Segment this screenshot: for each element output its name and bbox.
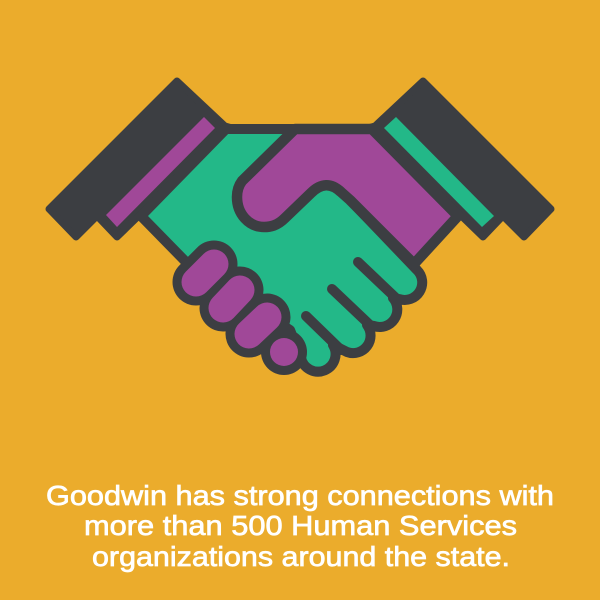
outline 1 — [196, 264, 214, 282]
finger outlines — [196, 264, 267, 334]
finger 2 — [223, 290, 240, 308]
caption line 2: more than 500 Human Services — [84, 510, 517, 541]
slit 1 — [358, 262, 398, 300]
finger 1 — [196, 264, 214, 282]
right cuff band — [384, 117, 494, 227]
slit 2 — [332, 289, 371, 326]
finger 3 — [249, 317, 267, 334]
right cuff — [368, 81, 551, 237]
finger 4 — [270, 338, 298, 366]
outline 3 — [249, 317, 267, 334]
icon: handshake — [49, 81, 551, 375]
right sleeve — [368, 81, 551, 237]
finger fills — [196, 264, 267, 334]
left cuff — [49, 81, 232, 237]
purple fingers — [196, 264, 307, 375]
outline 2 — [223, 290, 240, 308]
finger 4 outline — [261, 329, 307, 375]
green hand — [141, 129, 422, 372]
caption — [46, 480, 554, 572]
left cuff band — [106, 117, 215, 227]
caption line 1: Goodwin has strong connections with — [46, 480, 554, 511]
left sleeve — [49, 81, 232, 237]
purple hand — [237, 129, 458, 264]
caption line 3: organizations around the state. — [92, 541, 510, 572]
finger slits — [306, 262, 398, 350]
slit 3 — [306, 316, 341, 350]
